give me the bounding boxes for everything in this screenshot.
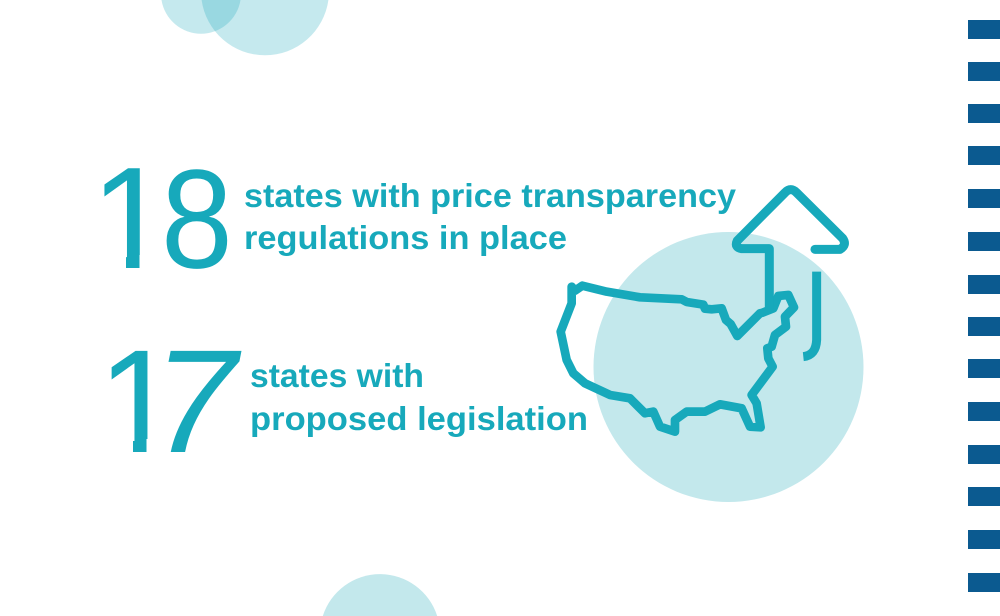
illustration: map with arrow — [561, 190, 864, 502]
label: states with price transparency regulations in place: states with price transparency — [244, 177, 737, 214]
number 17 — [112, 350, 242, 452]
icon: United States outline — [561, 286, 794, 432]
label: states with price transparency regulations in place: regulations in place — [244, 219, 567, 256]
label: states with proposed legislation: states with — [250, 357, 424, 394]
decorative circle: bottom — [323, 574, 437, 616]
stat: 18 states in place — [90, 137, 737, 299]
number 18 — [104, 168, 228, 269]
decorative stripes: right edge — [968, 20, 1000, 592]
stat: 17 states proposed — [112, 350, 586, 452]
large background circle — [594, 232, 864, 502]
label: states with proposed legislation: proposed legislation — [250, 400, 588, 437]
decorative circles: top — [162, 0, 328, 55]
icon: upward arrow — [736, 190, 844, 357]
number 18: 8 — [161, 140, 233, 298]
number 18: 1 — [90, 137, 171, 299]
number 17: 7 — [137, 320, 255, 484]
number 17: 1 — [98, 320, 179, 484]
